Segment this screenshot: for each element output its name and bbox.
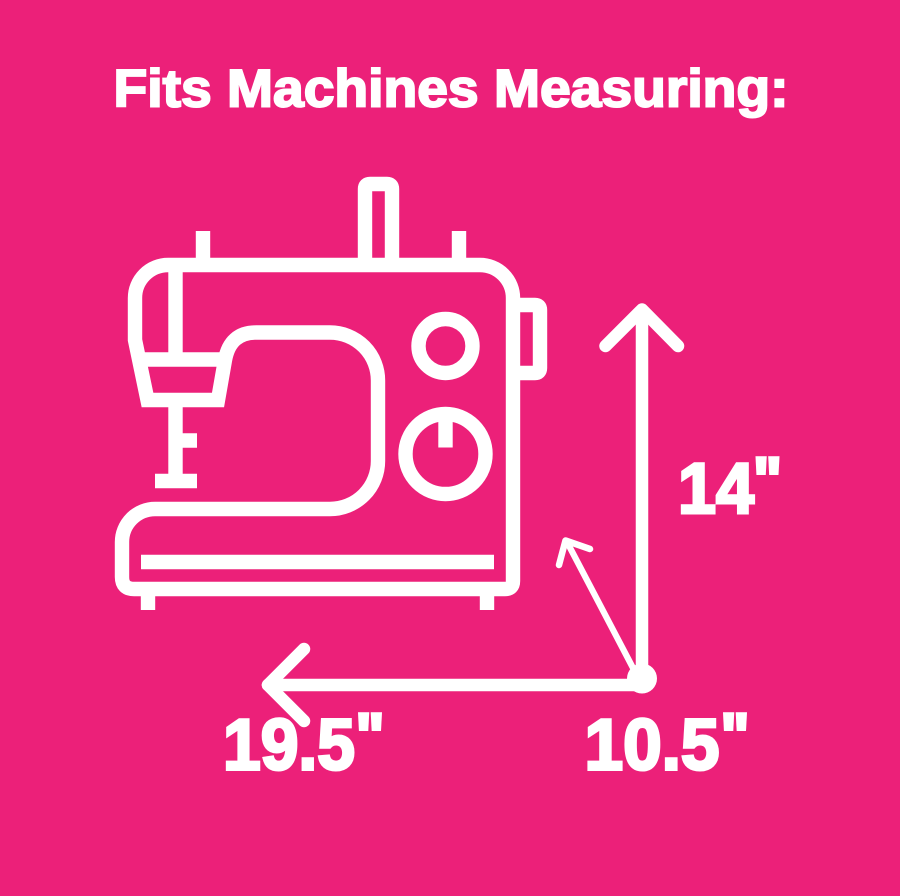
head vertical divider (168, 265, 183, 360)
label: width: " (356, 701, 384, 771)
foot right (480, 594, 494, 610)
foot left (141, 594, 155, 610)
label: depth: 10.5 (584, 706, 720, 786)
presser foot notch (176, 433, 197, 448)
label: height: " (753, 445, 782, 515)
arrow: width (268, 649, 642, 721)
arrow origin dot (627, 664, 657, 694)
arrow: height (606, 310, 678, 676)
label: width: 19.5 (223, 706, 355, 786)
lower dial (406, 414, 486, 494)
machine body outline (122, 265, 513, 589)
needle bar horizontal (140, 352, 226, 367)
arrow: depth (559, 540, 633, 668)
spool pin right (452, 231, 466, 265)
presser foot base (155, 474, 197, 488)
label: depth: " (720, 701, 750, 771)
label: height: 14 (678, 450, 754, 529)
presser foot stem (168, 400, 183, 482)
icon: sewing machine (122, 184, 540, 610)
side wheel (513, 305, 540, 373)
spool pin left (196, 231, 210, 265)
lower dial pointer (438, 414, 453, 448)
base plate line (141, 555, 494, 569)
upper dial (418, 319, 472, 373)
title: Fits Machines Measuring: (114, 60, 788, 118)
spool pin center (365, 184, 392, 265)
